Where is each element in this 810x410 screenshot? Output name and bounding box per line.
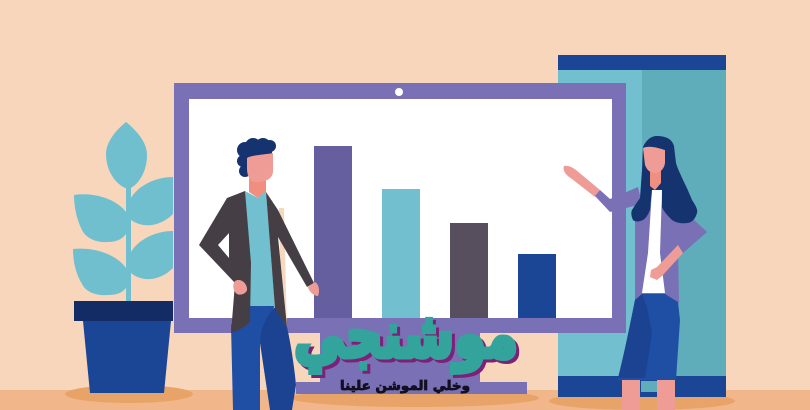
plant — [73, 122, 173, 393]
man neck — [249, 178, 266, 198]
woman neck — [650, 168, 661, 190]
woman jacket sleeve — [595, 187, 642, 212]
monitor — [174, 83, 626, 333]
watermark tagline: وخلي الموشن علينا — [340, 379, 470, 394]
bar chart — [314, 146, 556, 318]
woman shirt — [642, 190, 665, 293]
woman hair — [631, 136, 697, 223]
teal tower — [558, 55, 726, 397]
man legs — [231, 305, 275, 410]
man face — [247, 153, 273, 182]
woman face — [643, 147, 665, 173]
floor — [0, 385, 810, 410]
man figure — [199, 138, 319, 410]
plant pot — [83, 321, 171, 393]
watermark title: موشنجي — [294, 299, 518, 373]
man hands — [233, 280, 247, 295]
woman raised arm — [564, 166, 600, 197]
woman jacket — [635, 205, 707, 303]
watermark title: موشنجي — [297, 302, 521, 376]
monitor stand — [296, 333, 527, 394]
man jacket left — [199, 191, 251, 333]
man hair — [237, 138, 276, 177]
plant leaves — [73, 122, 173, 295]
plant stem — [126, 185, 131, 303]
man jacket right — [266, 192, 314, 327]
woman shorts — [618, 294, 680, 380]
woman forearm — [650, 245, 683, 280]
sliver behind man — [279, 208, 288, 372]
woman figure — [564, 136, 707, 410]
man shirt — [245, 191, 275, 306]
woman legs — [622, 380, 640, 410]
